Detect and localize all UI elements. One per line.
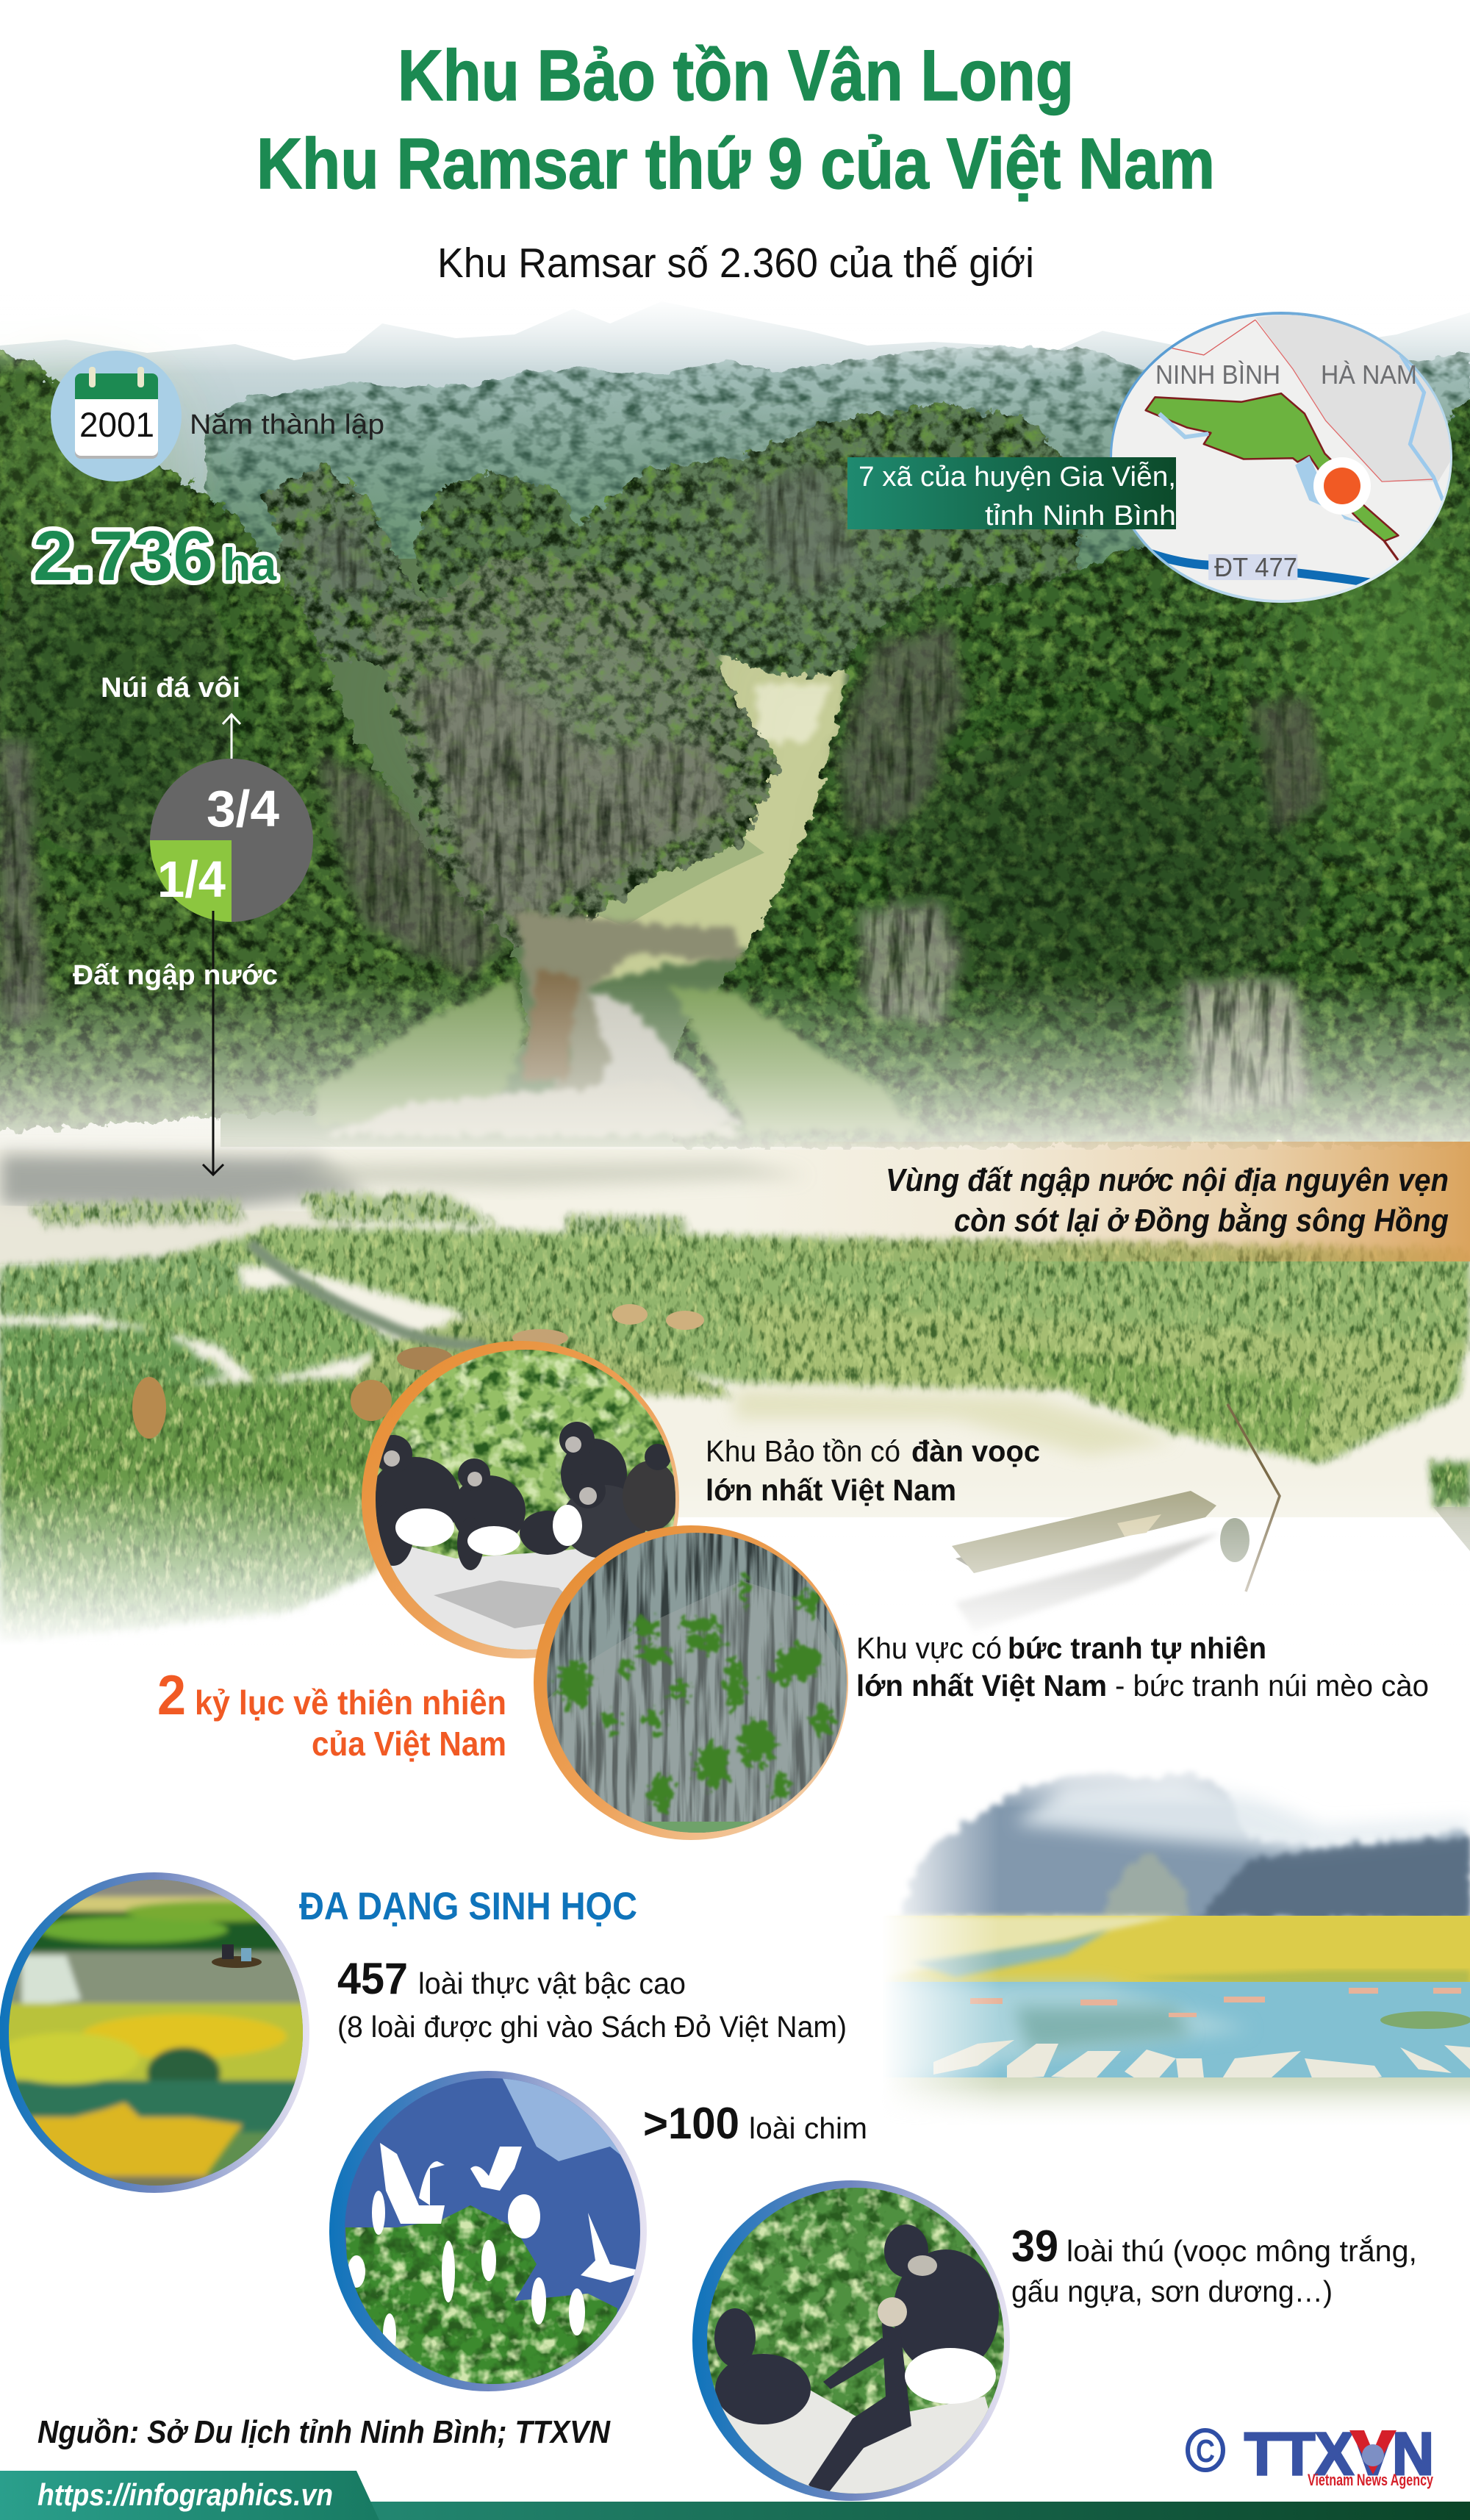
title [257,35,1215,204]
text: langur record: lớn nhất Việt Nam [706,1473,956,1507]
text: mammals: loài thú (voọc mông trắng, [1066,2234,1417,2268]
text: plants [337,1954,847,2044]
footer bar [0,2502,1470,2520]
hill C [559,404,1088,676]
right main mountain [676,375,1470,1147]
yellow field [882,1916,1470,1988]
callout: location [847,457,1176,531]
road [1150,554,1377,584]
grass main band [125,1228,1470,1463]
photo: Van Long lagoon with boats [882,1764,1470,2125]
callout: location: tỉnh Ninh Bình [985,501,1176,531]
left main mountain [0,346,529,1132]
moored white boats [933,2040,1470,2091]
map inset: NINH BÌNH [1155,359,1280,390]
photo circle: rock painting [534,1525,860,1845]
text: mammals [1011,2222,1417,2308]
text: rock painting record: bức tranh tự nhiên [1008,1631,1266,1665]
icon: calendar 2001: 2001 [79,405,154,444]
misty mountains [897,1772,1470,1919]
photo circle: egrets [329,2071,654,2391]
callout: location: 7 xã của huyện Gia Viễn, [858,461,1176,493]
central hill D [368,556,779,948]
pie chart: land share: 3/4 [207,780,279,837]
lagoon water [882,1982,1470,2079]
photo circle: wetland plants [0,1872,316,2198]
area figure: 2.736 [33,517,213,595]
far mountain range [0,301,1470,588]
water channel [250,1242,485,1345]
area figure: ha [223,540,277,590]
pole in water [1227,1404,1280,1592]
text: plants: (8 loài được ghi vào Sách Đỏ Việt Nam) [337,2010,847,2044]
cliff: central hill rock faces [412,662,735,926]
green plant clumps [557,1573,833,1813]
footer tab with url [0,2471,379,2520]
hill B [412,470,595,632]
pie chart: land share [150,759,313,922]
text: rock painting record: - bức tranh núi mèo cào [1115,1669,1429,1703]
grass left bands [0,1253,243,1316]
cliff: left mountain lower rock [316,750,507,978]
grass foreground meadow [0,1378,470,1647]
rock ledge at river foot [323,1081,742,1136]
text: plants: 457 [337,1954,408,2003]
founding year label: Năm thành lập [190,409,384,440]
title: Khu Ramsar thứ 9 của Việt Nam [257,124,1215,204]
cliff: upper hills [301,522,382,595]
icon: calendar 2001 [51,351,182,482]
pie chart: land share: 1/4 [157,851,226,908]
source line: Nguồn: Sở Du lịch tỉnh Ninh Bình; TTXVN [37,2414,611,2450]
mist fade over lower landscape [0,978,1470,1150]
valley base behind hills [220,559,956,1147]
buffaloes [132,1304,704,1439]
grass bands upper [29,1200,243,1224]
logo: TTXVN: C [1196,2433,1215,2469]
map inset: HÀ NAM [1321,359,1417,390]
photo circle: langur mother and baby [692,2180,1014,2501]
small tour boats [970,1988,1461,2017]
middle mountain range [206,346,1470,603]
wetland dark water [0,1154,368,1209]
reserve area [1146,393,1398,541]
arrow: down to wetland [203,911,223,1175]
map marker [1313,457,1371,515]
sky fade [0,294,1470,375]
valley rice field [544,647,845,985]
meadow by river [316,978,526,1125]
text: rock painting record: lớn nhất Việt Nam [856,1669,1107,1703]
river in valley [514,912,742,1132]
title: Khu Bảo tồn Vân Long [398,35,1074,115]
hill A [265,463,448,662]
logo: TTXVN: TTXVN [1244,2421,1434,2488]
text: two records: kỷ lục về thiên nhiên [195,1683,506,1722]
text: langur record: đàn voọc [911,1434,1040,1468]
panel: hero landscape of limestone mountains [0,294,1470,1150]
label: wetland: Đất ngập nước [73,960,278,991]
subtitle: Khu Ramsar số 2.360 của thế giới [437,240,1034,287]
text: birds [643,2099,867,2148]
text: rock painting record [856,1631,1429,1703]
callout: wetland statement [735,1142,1470,1261]
white edge fade for lagoon bottom [882,2088,1470,2128]
tree foliage [345,2205,617,2389]
text: langur record [706,1434,1040,1507]
map inset [1110,312,1452,603]
text: plants: loài thực vật bậc cao [418,1966,686,2000]
small grass clump right [1430,1459,1470,1507]
panel: wetland landscape [0,1150,1470,1689]
text: two records: 2 [157,1664,186,1727]
text: mammals: gấu ngựa, sơn dương…) [1011,2274,1333,2308]
water reed reflection [1220,1518,1250,1562]
photo circle: langur group [362,1341,684,1661]
text: birds: loài chim [749,2111,867,2145]
text: two records: của Việt Nam [312,1725,506,1763]
arrow: up to limestone [223,715,240,776]
wetland fade to white [0,1478,1470,1647]
neighbouring province area [1255,315,1450,482]
label: limestone: Núi đá vôi [101,673,240,704]
egrets [348,2143,645,2355]
reflection on right water [735,1389,1176,1456]
text: mammals: 39 [1011,2222,1058,2271]
shoreline grass [882,2077,1470,2125]
map inset: ĐT 477 [1214,552,1297,582]
text: langur record: Khu Bảo tồn có [706,1434,900,1468]
text: rock painting record: Khu vực có [856,1631,1002,1665]
footer tab with url: https://infographics.vn [37,2477,333,2512]
heading: biodiversity: ĐA DẠNG SINH HỌC [299,1885,637,1928]
cliff: right mountain faces [838,625,963,838]
text: two records [157,1664,506,1763]
boat on water [952,1491,1220,1632]
tonal patches on mountains [0,390,1470,1014]
text: birds: >100 [643,2099,739,2148]
